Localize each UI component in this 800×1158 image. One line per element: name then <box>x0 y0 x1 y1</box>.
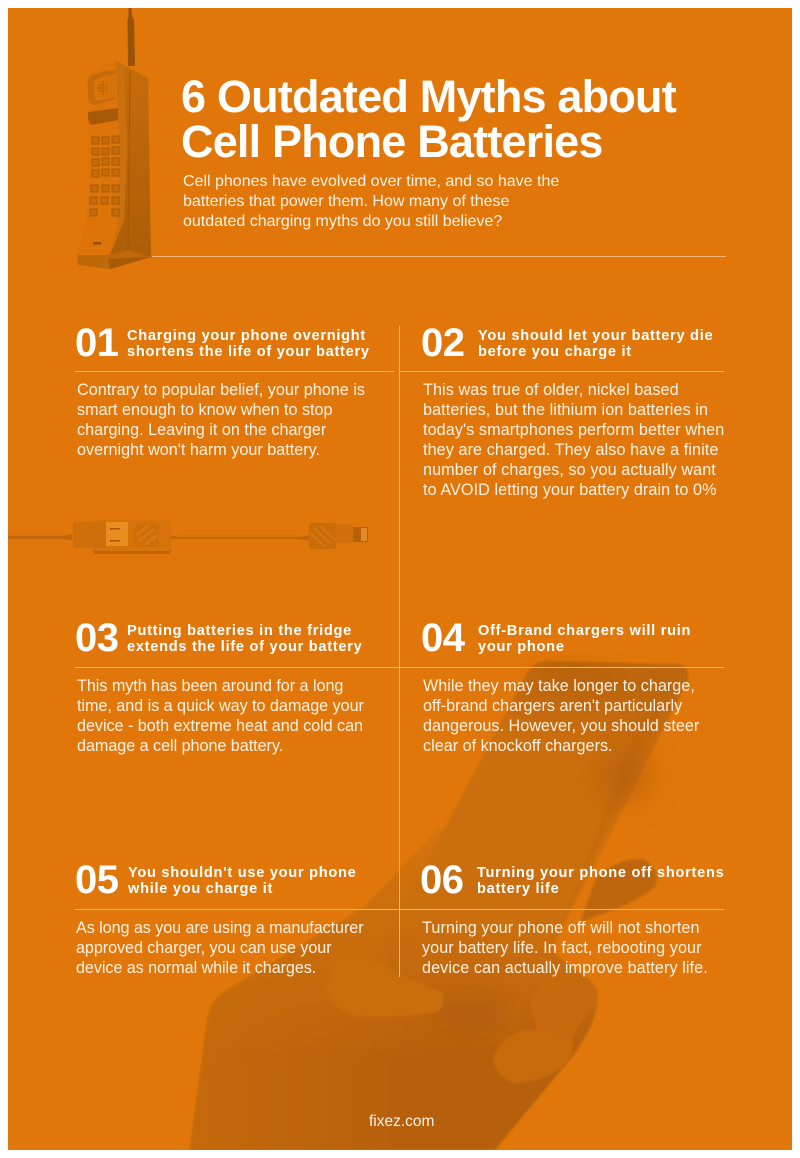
number 06: 06 <box>420 858 464 902</box>
body 02: batteries, but the lithium ion batteries in <box>423 401 708 419</box>
body 04 <box>423 677 699 755</box>
heading 05: You shouldn't use your phone <box>128 864 356 880</box>
keypad <box>90 136 119 216</box>
myth 05 <box>75 858 399 977</box>
rule 03 <box>75 667 399 668</box>
rule 04 <box>400 667 724 668</box>
intro text: Cell phones have evolved over time, and so have the <box>183 173 559 190</box>
rule 02 <box>400 371 724 372</box>
phone body <box>77 60 151 269</box>
myth 04 <box>400 616 724 755</box>
title: 6 Outdated Myths about <box>181 71 676 122</box>
body 04: dangerous. However, you should steer <box>423 717 699 735</box>
heading 01 <box>127 328 370 360</box>
myth 02 <box>400 321 724 499</box>
rule 05 <box>75 909 399 910</box>
title <box>181 71 676 167</box>
body 05 <box>76 919 364 977</box>
body 01: Contrary to popular belief, your phone is <box>77 381 365 399</box>
myth 06 <box>400 858 724 977</box>
body 06: your battery life. In fact, rebooting your <box>422 939 702 957</box>
body 03: device - both extreme heat and cold can <box>77 717 363 735</box>
body 02: they are charged. They also have a finite <box>423 441 718 459</box>
body 06 <box>422 919 708 977</box>
speaker dots <box>97 81 108 95</box>
heading 01: Charging your phone overnight <box>127 328 366 344</box>
heading 02: before you charge it <box>478 344 632 360</box>
body 05: approved charger, you can use your <box>76 939 332 957</box>
body 02: to AVOID letting your battery drain to 0% <box>423 481 717 499</box>
fingers <box>580 859 657 922</box>
body 06: Turning your phone off will not shorten <box>422 919 700 937</box>
header divider <box>152 256 726 257</box>
title: Cell Phone Batteries <box>181 116 603 167</box>
body 01: smart enough to know when to stop <box>77 401 333 419</box>
heading 05: while you charge it <box>128 880 273 896</box>
footer: website: fixez.com <box>369 1113 434 1130</box>
number 02: 02 <box>421 321 464 365</box>
heading 06 <box>477 864 724 896</box>
myth 03 <box>75 616 399 755</box>
rule 06 <box>400 909 724 910</box>
thumb <box>344 984 444 1016</box>
myth 01 <box>75 321 394 459</box>
body 01: overnight won't harm your battery. <box>77 441 320 459</box>
rule 01 <box>75 371 394 372</box>
body 01 <box>77 381 365 459</box>
heading 01: shortens the life of your battery <box>127 344 370 360</box>
heading 04: your phone <box>478 638 565 654</box>
body 03: time, and is a quick way to damage your <box>77 697 364 715</box>
heading 04 <box>478 622 691 654</box>
body 03 <box>77 677 364 755</box>
heading 06: Turning your phone off shortens <box>477 864 724 880</box>
body 04: While they may take longer to charge, <box>423 677 695 695</box>
body 02: today's smartphones perform better when <box>423 421 724 439</box>
body 06: device can actually improve battery life. <box>422 959 708 977</box>
number 01: 01 <box>75 321 118 365</box>
heading 03: Putting batteries in the fridge <box>127 622 352 638</box>
body 04: clear of knockoff chargers. <box>423 737 613 755</box>
body 01: charging. Leaving it on the charger <box>77 421 326 439</box>
number 03: 03 <box>75 616 118 660</box>
column divider <box>399 326 400 977</box>
antenna <box>128 8 135 66</box>
body 02: This was true of older, nickel based <box>423 381 679 399</box>
body 03: This myth has been around for a long <box>77 677 343 695</box>
image: hand holding smartphone <box>190 660 689 1150</box>
hand base <box>190 827 597 1150</box>
heading 02: You should let your battery die <box>478 328 713 344</box>
body 02 <box>423 381 724 499</box>
heading 03: extends the life of your battery <box>127 638 363 654</box>
body 05: device as normal while it charges. <box>76 959 316 977</box>
earpiece <box>88 70 115 105</box>
heading 05 <box>128 864 356 896</box>
number 05: 05 <box>75 858 118 902</box>
heading 02 <box>478 328 713 360</box>
body 02: number of charges, so you actually want <box>423 461 716 479</box>
body 05: As long as you are using a manufacturer <box>76 919 364 937</box>
intro text <box>183 173 559 230</box>
display <box>88 108 118 125</box>
number 04: 04 <box>421 616 464 660</box>
body 03: damage a cell phone battery. <box>77 737 283 755</box>
intro text: batteries that power them. How many of these <box>183 193 509 210</box>
heading 04: Off-Brand chargers will ruin <box>478 622 691 638</box>
phone <box>436 660 689 949</box>
intro text: outdated charging myths do you still believe? <box>183 213 502 230</box>
heading 06: battery life <box>477 880 559 896</box>
body 04: off-brand chargers aren't particularly <box>423 697 682 715</box>
heading 03 <box>127 622 363 654</box>
